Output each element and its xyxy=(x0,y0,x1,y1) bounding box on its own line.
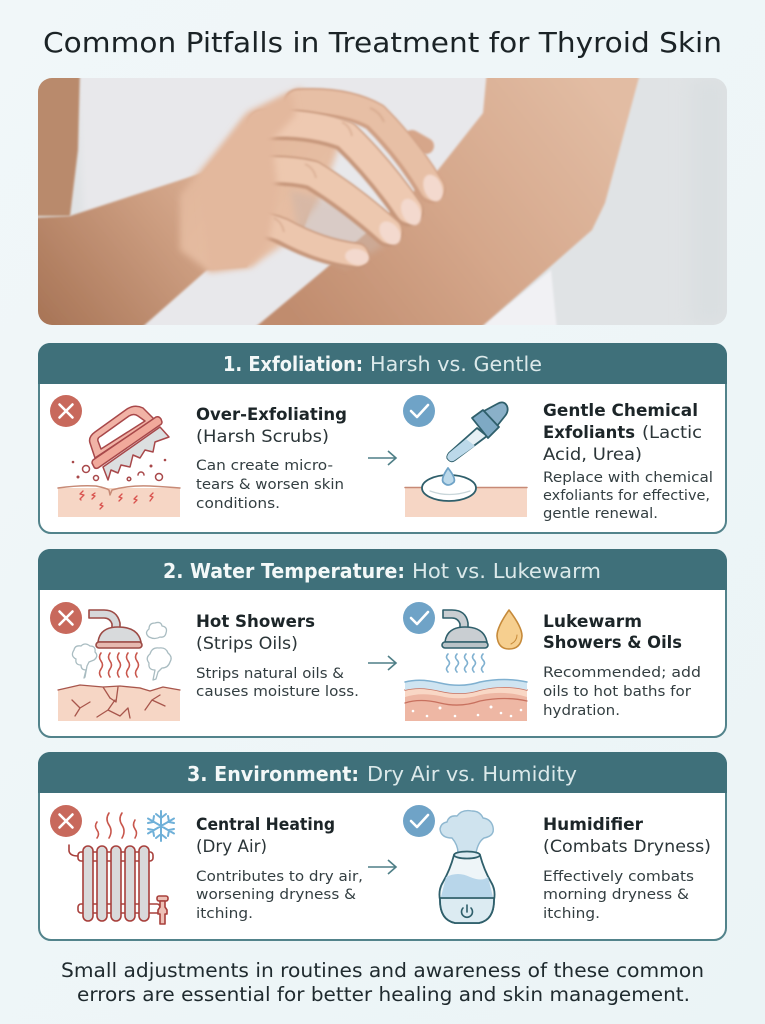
text: central heating: itching. xyxy=(196,906,253,922)
text: lukewarm showers: Recommended; add xyxy=(543,665,701,681)
arrow xyxy=(368,860,396,874)
text: over-exfoliating: tears & worsen skin xyxy=(196,477,344,493)
text: over-exfoliating: Can create micro- xyxy=(196,458,333,474)
text: hot showers: Hot Showers xyxy=(196,612,315,631)
icon: humidifier xyxy=(439,811,495,923)
icon: x badge xyxy=(50,602,82,634)
text: lukewarm showers: hydration. xyxy=(543,703,620,719)
panel 1 header: 1. Exfoliation: xyxy=(223,352,363,376)
text: gentle chemical exfoliants: Exfoliants xyxy=(543,423,635,442)
photo: hand scratching forearm xyxy=(30,70,730,330)
text: hot showers xyxy=(196,612,359,700)
panel 2 header: Hot vs. Lukewarm xyxy=(412,559,601,583)
panel 3 header: 3. Environment: xyxy=(187,762,359,786)
panel: environment xyxy=(38,752,727,940)
text: humidifier: Effectively combats xyxy=(543,869,694,885)
panel: water temperature xyxy=(38,549,727,737)
panel 1 header: Harsh vs. Gentle xyxy=(370,352,542,376)
text: over-exfoliating: Over-Exfoliating xyxy=(196,405,347,424)
text: humidifier: Humidifier xyxy=(543,815,644,834)
text: humidifier: morning dryness & xyxy=(543,887,689,903)
text: gentle chemical exfoliants: (Lactic xyxy=(642,423,702,442)
arrow xyxy=(368,451,396,465)
text: hot showers: Strips natural oils & xyxy=(196,666,344,682)
text: central heating: worsening dryness & xyxy=(196,887,356,903)
text: over-exfoliating: (Harsh Scrubs) xyxy=(196,427,329,446)
title: Common Pitfalls in Treatment for Thyroid Skin xyxy=(43,26,722,59)
icon: check badge xyxy=(403,395,435,427)
icon: harsh scrub brush on skin xyxy=(58,406,180,517)
text: humidifier: (Combats Dryness) xyxy=(543,837,711,856)
text: over-exfoliating: conditions. xyxy=(196,496,280,512)
icon: hot shower and cracked skin xyxy=(58,610,180,721)
text: central heating: Contributes to dry air, xyxy=(196,869,363,885)
text: gentle chemical exfoliants xyxy=(543,401,713,522)
footer summary: Small adjustments in routines and awareness of these common xyxy=(61,959,704,982)
icon: check badge xyxy=(403,805,435,837)
text: hot showers: causes moisture loss. xyxy=(196,684,359,700)
icon: check badge xyxy=(403,602,435,634)
arrow xyxy=(368,656,396,670)
text: lukewarm showers: Lukewarm xyxy=(543,612,642,631)
text: lukewarm showers xyxy=(543,612,701,719)
icon: lukewarm shower, oil drop and skin layers xyxy=(405,610,527,721)
panel 2 header xyxy=(38,549,727,590)
text: gentle chemical exfoliants: Gentle Chemical xyxy=(543,401,698,420)
footer summary: errors are essential for better healing and skin management. xyxy=(77,983,690,1006)
icon: dropper and skin xyxy=(405,402,527,517)
icon: x badge xyxy=(50,805,82,837)
panel 1 header xyxy=(38,343,727,384)
footer summary xyxy=(61,959,704,1006)
text: lukewarm showers: Showers & Oils xyxy=(543,633,682,652)
panel: exfoliation xyxy=(38,343,727,533)
text: over-exfoliating xyxy=(196,405,347,512)
text: central heating: Central Heating xyxy=(196,815,335,834)
text: humidifier: itching. xyxy=(543,906,600,922)
icon: x badge xyxy=(50,395,82,427)
text: central heating: (Dry Air) xyxy=(196,837,267,856)
text: gentle chemical exfoliants: Replace with chemical xyxy=(543,470,713,486)
panel 3 header: Dry Air vs. Humidity xyxy=(367,762,577,786)
text: hot showers: (Strips Oils) xyxy=(196,634,298,653)
text: gentle chemical exfoliants: Acid, Urea) xyxy=(543,445,642,464)
panel 2 header: 2. Water Temperature: xyxy=(163,559,405,583)
text: central heating xyxy=(196,815,363,922)
text: lukewarm showers: oils to hot baths for xyxy=(543,684,691,700)
icon: radiator, heat and snowflake xyxy=(69,811,174,924)
text: humidifier xyxy=(543,815,711,922)
text: gentle chemical exfoliants: gentle renewal. xyxy=(543,506,658,522)
panel 3 header xyxy=(38,752,727,793)
text: gentle chemical exfoliants: exfoliants for effective, xyxy=(543,488,710,504)
